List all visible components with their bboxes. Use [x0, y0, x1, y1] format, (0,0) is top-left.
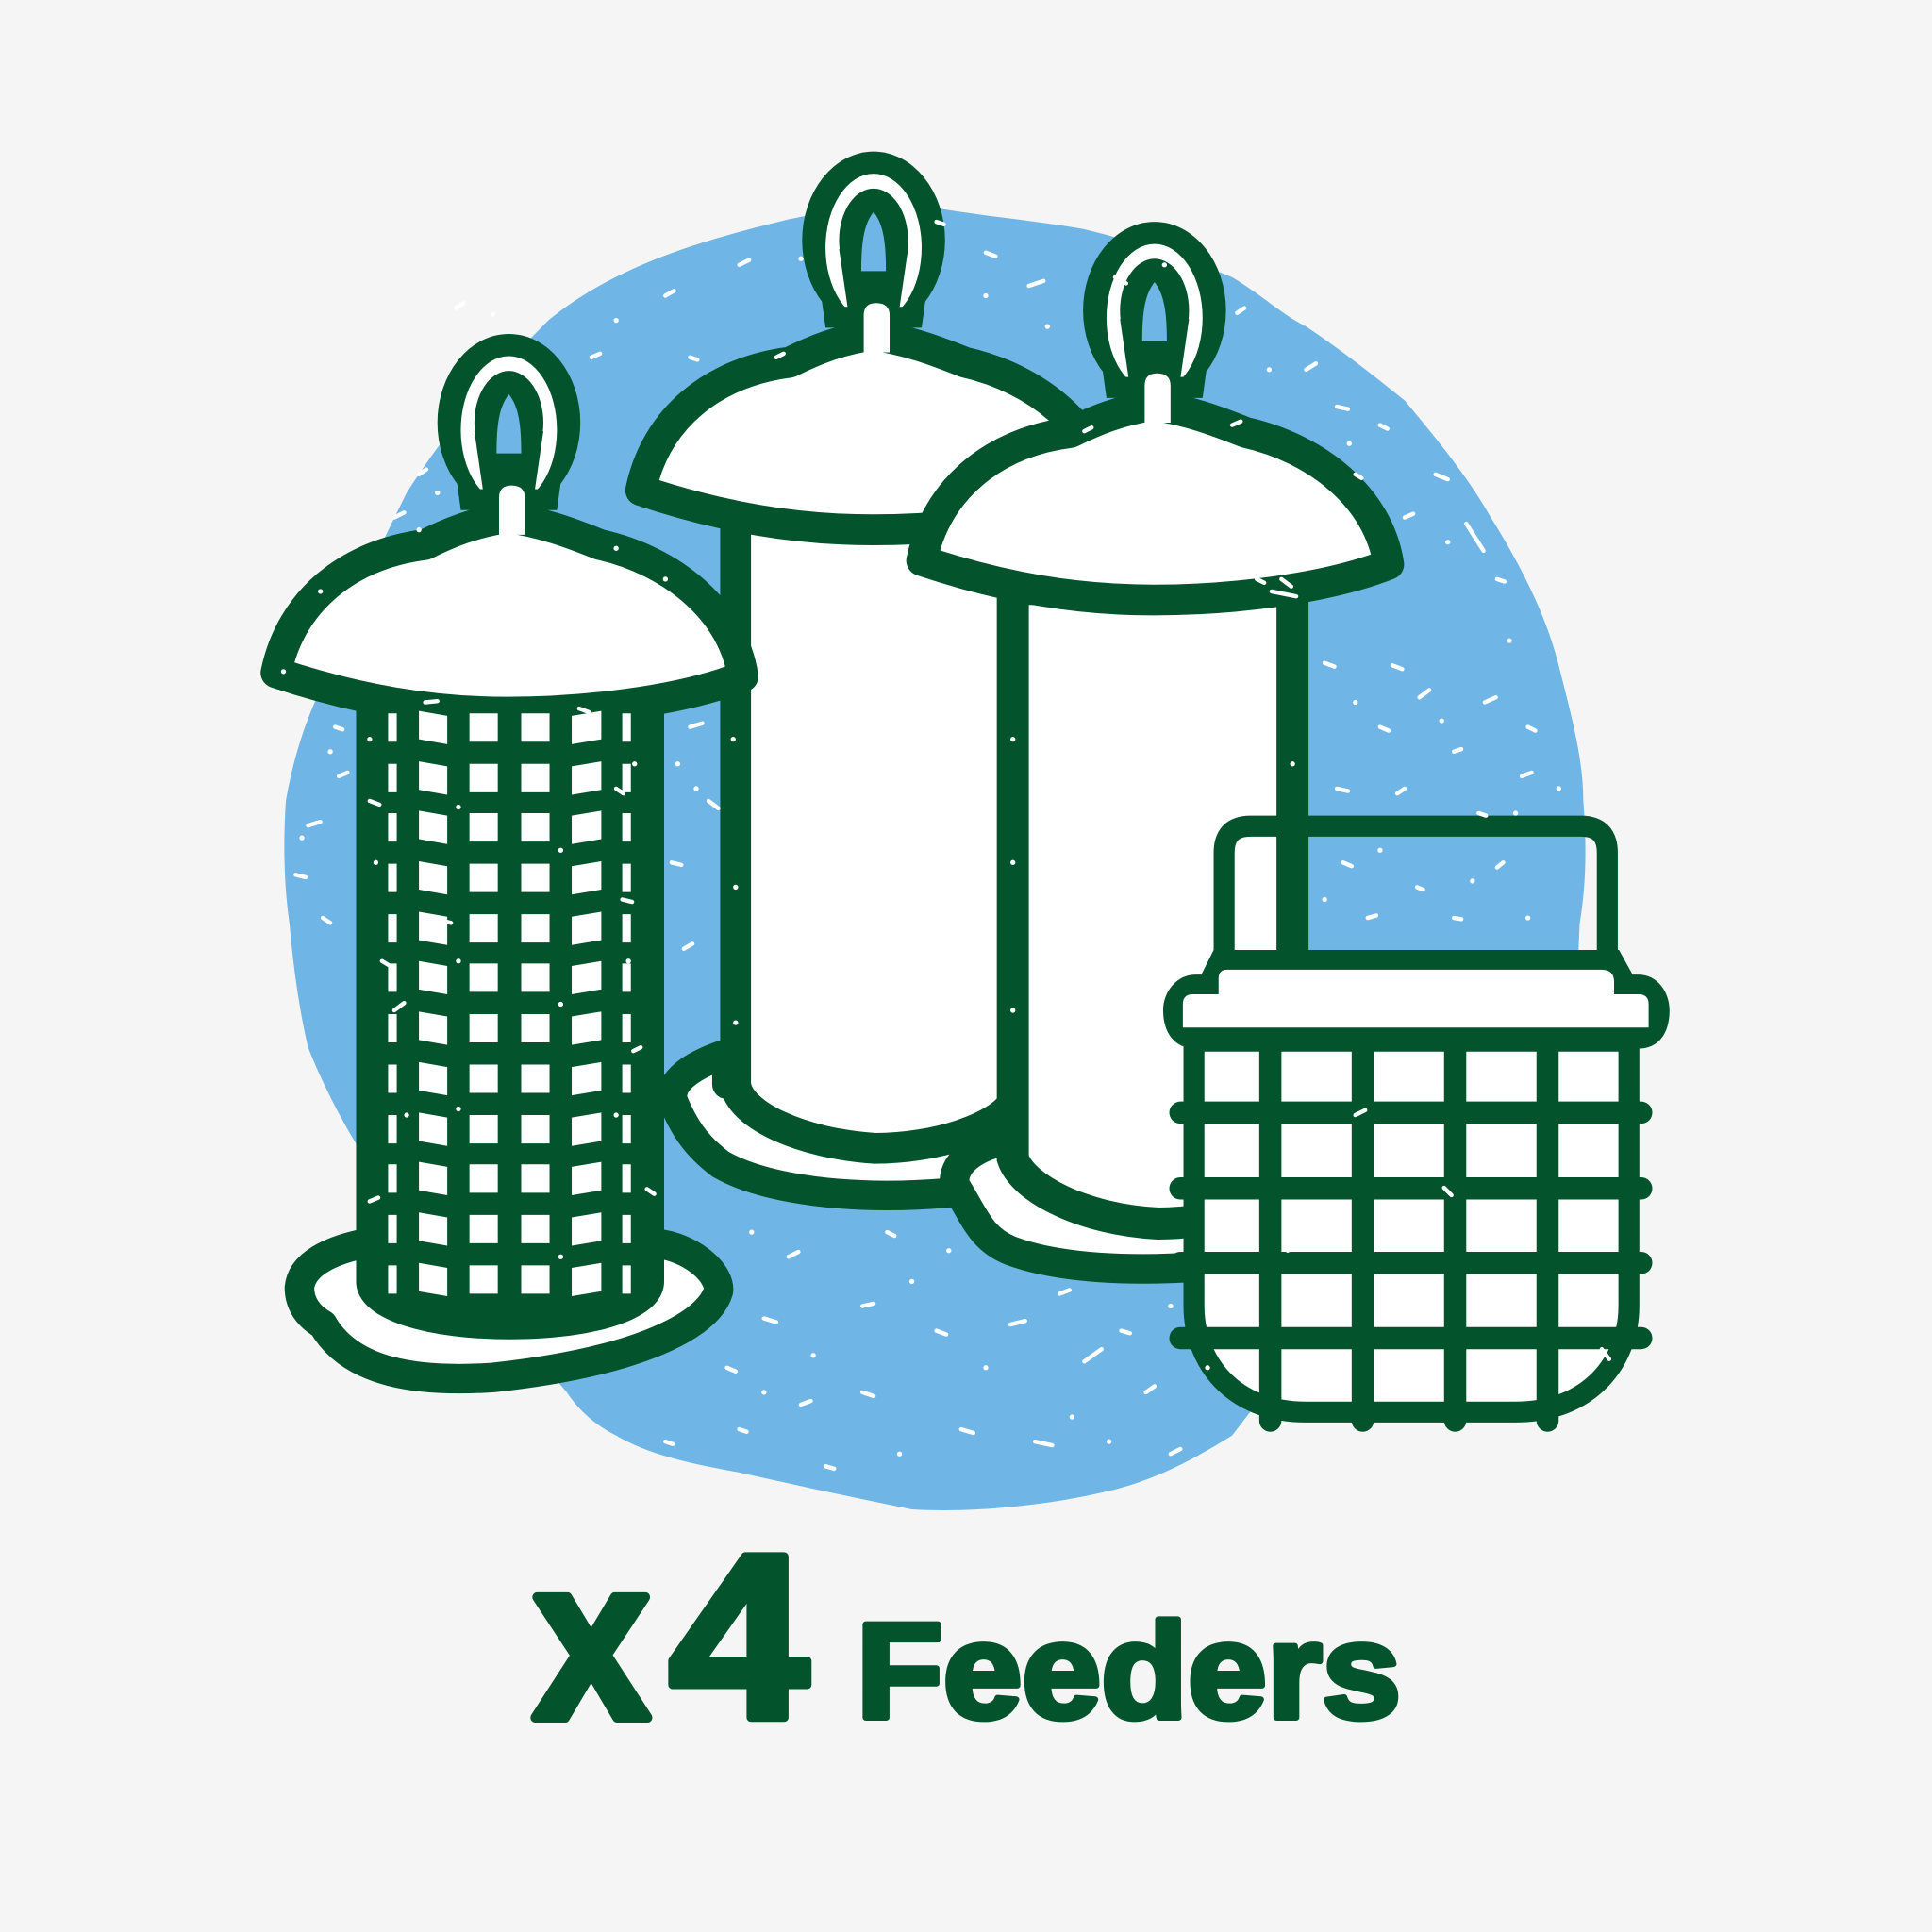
left feeder mesh body — [356, 690, 664, 1340]
basket lid — [1163, 950, 1670, 1049]
middle feeder hanger and dome — [641, 152, 1108, 530]
right feeder tray — [955, 1140, 1201, 1269]
feeder: middle tube — [641, 152, 1108, 1195]
left feeder mesh windows — [388, 711, 631, 1296]
quantity x4 — [534, 1506, 808, 1768]
distressed white speckle texture — [283, 222, 1609, 1469]
quantity x4: 4 — [669, 1506, 808, 1768]
left feeder hanger and dome — [276, 334, 743, 712]
caption: x4 Feeders — [534, 1506, 1401, 1768]
middle feeder body — [736, 518, 1013, 1148]
feeder: suet cage basket — [1163, 826, 1670, 1421]
feeder: right tube — [922, 222, 1389, 1269]
basket bars — [1180, 1049, 1641, 1421]
middle feeder tray — [673, 1054, 1010, 1195]
feeder: left mesh tube — [276, 334, 743, 1379]
right feeder body — [1013, 589, 1292, 1224]
blue textured blob — [284, 204, 1586, 1510]
left feeder tray — [299, 1244, 719, 1379]
right feeder hanger and dome — [922, 222, 1389, 600]
quantity x4: x — [534, 1512, 649, 1767]
basket cage — [1194, 1041, 1629, 1412]
basket handle — [1224, 826, 1607, 961]
label Feeders: Feeders — [857, 1596, 1401, 1747]
